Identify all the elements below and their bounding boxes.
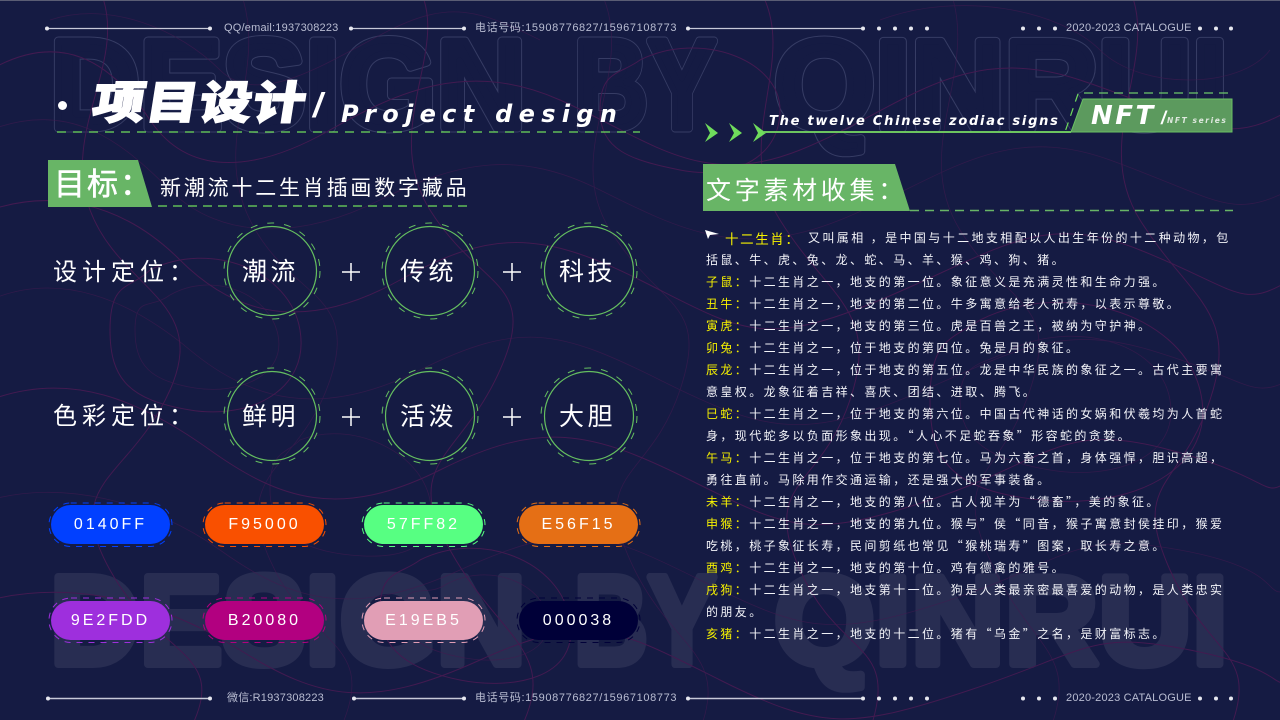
swatch 0140FF: 0140FF xyxy=(74,516,147,533)
swatch 000038 xyxy=(519,601,638,640)
swatch 0140FF xyxy=(51,505,170,544)
watermark outline: DESIGN BY QINRUI: QINRUI xyxy=(774,14,1228,155)
tiger: 寅虎：十二生肖之一，地支的第三位。虎是百兽之王，被纳为守护神。 xyxy=(706,317,1152,334)
chevrons xyxy=(705,123,766,142)
plus xyxy=(503,263,521,281)
top edge line xyxy=(0,0,1280,1)
swatch F95000: F95000 xyxy=(228,516,301,533)
snake continued: 身，现代蛇多以负面形象出现。“人心不足蛇吞象”形容蛇的贪婪。 xyxy=(706,427,1132,444)
watermark solid: DESIGN BY QINRUI xyxy=(50,550,1228,693)
NFT label: NFT xyxy=(1091,101,1156,131)
circle: tradition xyxy=(382,222,478,320)
pig: 亥猪：十二生肖之一，地支的十二位。猪有“乌金”之名，是财富标志。 xyxy=(706,625,1167,642)
rooster: 酉鸡：十二生肖之一，地支的第十位。鸡有德禽的雅号。 xyxy=(706,559,1066,576)
title slash: / xyxy=(313,87,322,125)
circle: vivid: 鲜明 xyxy=(242,403,299,431)
footer text: phone: 电话号码:15908776827/15967108773 xyxy=(475,692,677,704)
dog continued: 的朋友。 xyxy=(706,603,764,620)
watermark solid: DESIGN BY QINRUI: BY xyxy=(574,550,716,691)
watermark outline: DESIGN BY QINRUI: BY xyxy=(574,14,716,155)
title dashed underline xyxy=(57,131,640,133)
swatch 9E2FDD: 9E2FDD xyxy=(71,612,150,629)
horse continued: 勇往直前。马除用作交通运输，还是强大的军事装备。 xyxy=(706,471,1052,488)
zodiac text block xyxy=(705,228,1231,642)
swatch E56F15: E56F15 xyxy=(541,516,616,533)
dragon: 辰龙：十二生肖之一，位于地支的第五位。龙是中华民族的象征之一。古代主要寓 xyxy=(706,361,1224,378)
circle: trend xyxy=(224,222,320,320)
goal heading xyxy=(48,160,469,207)
colour swatches xyxy=(48,502,640,643)
swatch 57FF82 xyxy=(364,505,483,544)
ox: 丑牛：十二生肖之一，地支的第二位。牛多寓意给老人祝寿，以表示尊敬。 xyxy=(706,295,1181,312)
title bullet xyxy=(58,101,67,110)
circle: tradition: 传统 xyxy=(400,258,457,286)
watermark outline: DESIGN BY QINRUI: QINRUI xyxy=(774,14,1228,155)
swatch F95000 xyxy=(205,505,324,544)
intro heading: 十二生肖： xyxy=(725,228,800,248)
circle: lively: 活泼 xyxy=(400,403,457,431)
circle: bold xyxy=(540,368,638,464)
snake: 巳蛇：十二生肖之一，位于地支的第六位。中国古代神话的女娲和伏羲均为人首蛇 xyxy=(706,405,1224,422)
plus xyxy=(503,408,521,426)
swatch 000038: 000038 xyxy=(543,612,614,629)
watermark solid: DESIGN BY QINRUI: QINRUI xyxy=(774,550,1228,691)
NFT series: NFT series xyxy=(1167,116,1228,125)
zodiac subtitle: The twelve Chinese zodiac signs xyxy=(769,114,1060,129)
material heading xyxy=(703,164,1233,212)
monkey continued: 吃桃，桃子象征长寿，民间剪纸也常见“猴桃瑞寿”图案，取长寿之意。 xyxy=(706,537,1167,554)
swatch B20080 xyxy=(205,601,324,640)
watermark solid: DESIGN BY QINRUI: DESIGN xyxy=(50,550,526,691)
watermark outline: DESIGN BY QINRUI xyxy=(50,14,1228,158)
circle: technology: 科技 xyxy=(559,258,616,286)
intro line 1: 又叫属相 ，是中国与十二地支相配以人出生年份的十二种动物，包 xyxy=(808,229,1231,246)
circle: technology xyxy=(540,222,638,320)
goal dashed underline xyxy=(158,205,467,207)
circle: lively xyxy=(382,368,478,464)
swatch E19EB5: E19EB5 xyxy=(385,612,462,629)
header text: email: QQ/email:1937308223 xyxy=(224,22,338,34)
goal text: 新潮流十二生肖插画数字藏品 xyxy=(160,177,469,200)
footer strip xyxy=(46,692,1233,704)
arrow icon xyxy=(705,230,719,239)
material label: 文字素材收集： xyxy=(706,177,907,205)
watermark outline: DESIGN BY QINRUI: BY xyxy=(574,14,716,155)
swatch E19EB5 xyxy=(364,601,483,640)
row label: 设计定位： xyxy=(53,259,198,286)
NFT slash: / xyxy=(1161,108,1166,128)
row: colour positioning xyxy=(53,368,638,464)
row: design positioning xyxy=(53,222,638,320)
footer text: wechat: 微信:R1937308223 xyxy=(227,692,324,704)
header text: catalogue: 2020-2023 CATALOGUE xyxy=(1066,22,1192,34)
NFT tag shape xyxy=(1065,92,1232,132)
goal badge xyxy=(48,160,152,207)
material badge xyxy=(703,164,1233,212)
title Chinese: 项目设计 xyxy=(89,79,311,129)
swatch 57FF82: 57FF82 xyxy=(387,516,460,533)
circle: bold: 大胆 xyxy=(559,403,616,431)
footer lines and dots xyxy=(46,696,1233,700)
intro line 2: 括鼠、牛、虎、兔、龙、蛇、马、羊、猴、鸡、狗、猪。 xyxy=(706,251,1066,268)
watermark outline: DESIGN BY QINRUI: DESIGN xyxy=(50,14,526,155)
title English: Project design xyxy=(341,100,623,128)
watermark outline: DESIGN BY QINRUI: DESIGN xyxy=(50,14,526,155)
rabbit: 卯兔：十二生肖之一，位于地支的第四位。兔是月的象征。 xyxy=(706,339,1080,356)
swatch B20080: B20080 xyxy=(228,612,301,629)
banner underline xyxy=(764,131,1071,133)
header strip xyxy=(45,22,1233,34)
horse: 午马：十二生肖之一，位于地支的第七位。马为六畜之首，身体强悍，胆识高超， xyxy=(706,449,1224,466)
plus xyxy=(342,263,360,281)
dragon continued: 意皇权。龙象征着吉祥、喜庆、团结、进取、腾飞。 xyxy=(706,383,1037,400)
plus xyxy=(342,408,360,426)
swatch dashed outlines xyxy=(48,502,640,643)
rat: 子鼠：十二生肖之一，地支的第一位。象征意义是充满灵性和生命力强。 xyxy=(706,273,1167,290)
title block xyxy=(57,79,640,133)
swatch 9E2FDD xyxy=(51,601,170,640)
header lines and dots xyxy=(45,26,1233,30)
circle: vivid xyxy=(224,368,320,464)
swatch E56F15 xyxy=(519,505,638,544)
row label: 色彩定位： xyxy=(53,403,198,430)
footer text: catalogue: 2020-2023 CATALOGUE xyxy=(1066,692,1192,704)
goal label: 目标： xyxy=(54,167,153,202)
dog: 戌狗：十二生肖之一，地支第十一位。狗是人类最亲密最喜爱的动物，是人类忠实 xyxy=(706,581,1224,598)
monkey: 申猴：十二生肖之一，地支的第九位。猴与”侯“同音，猴子寓意封侯挂印，猴爱 xyxy=(706,515,1224,532)
goat: 未羊：十二生肖之一，地支的第八位。古人视羊为“德畜”，美的象征。 xyxy=(706,493,1161,510)
NFT banner xyxy=(705,92,1232,142)
header text: phone: 电话号码:15908776827/15967108773 xyxy=(475,22,677,34)
circle: trend: 潮流 xyxy=(242,258,299,286)
